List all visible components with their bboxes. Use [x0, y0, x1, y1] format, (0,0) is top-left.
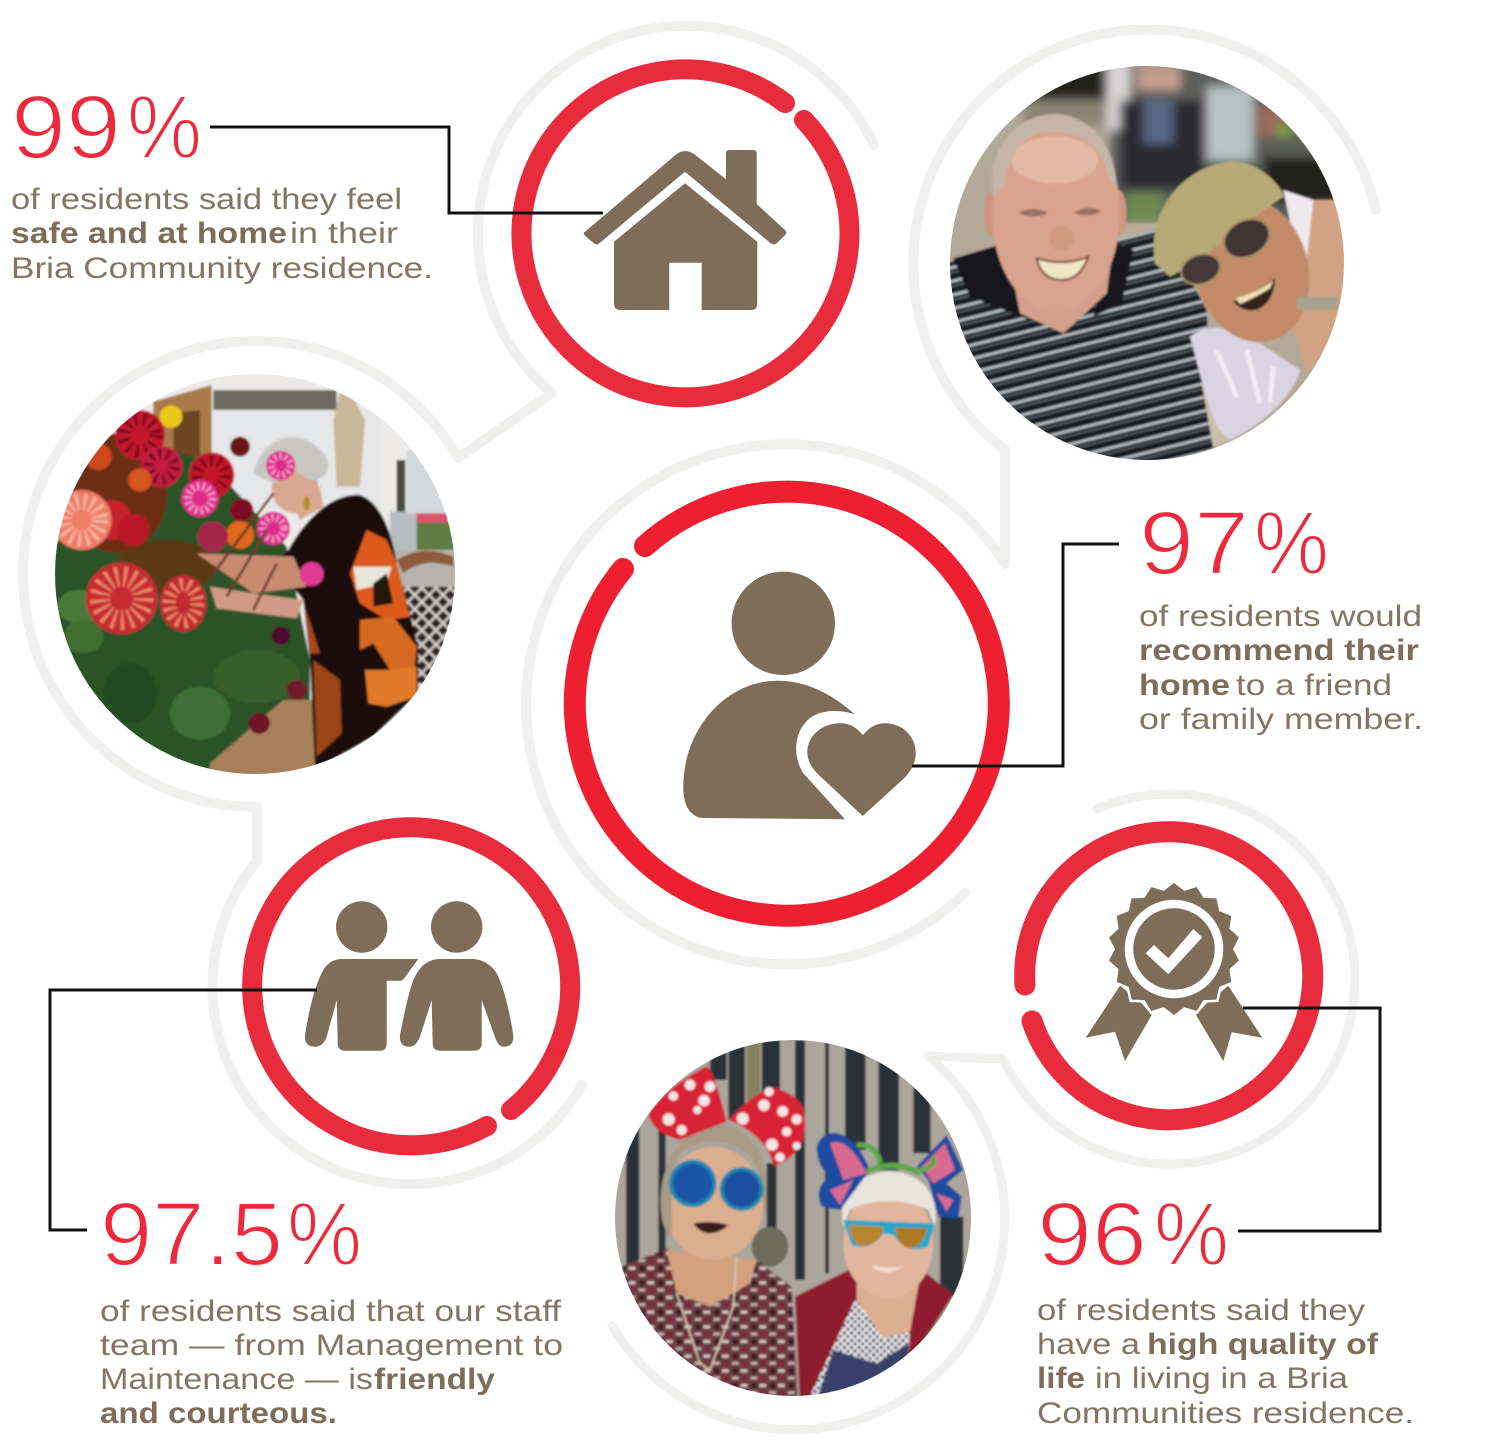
description: friendly	[374, 1363, 495, 1396]
big number	[1037, 1185, 1229, 1285]
right woman	[795, 1269, 953, 1410]
description: of residents said they	[1037, 1294, 1365, 1327]
big number: %	[287, 1185, 362, 1285]
connector: 99% to home icon	[210, 127, 603, 213]
shirt left man	[947, 227, 1217, 470]
big number: %	[1254, 494, 1329, 594]
red ring: home	[521, 69, 849, 397]
left woman	[622, 1248, 798, 1410]
description: Bria Community residence.	[11, 252, 433, 285]
description: or family member.	[1139, 703, 1423, 736]
description: of residents would	[1139, 600, 1422, 633]
polka bow	[648, 1066, 727, 1140]
description: life	[1037, 1362, 1085, 1395]
description	[11, 183, 433, 285]
icon: award ribbon	[1086, 883, 1262, 1061]
connector: 96% to ribbon icon	[1238, 1008, 1380, 1231]
dress	[273, 495, 418, 770]
red ring: recommend	[575, 492, 999, 916]
red ring: staff	[252, 827, 570, 1145]
description: in their	[290, 217, 398, 250]
description	[1139, 600, 1423, 736]
turquoise sunglasses	[843, 1220, 935, 1249]
arms	[197, 553, 307, 593]
stat block: 97%	[1139, 494, 1423, 736]
connector: 97% to heart icon	[912, 544, 1119, 766]
photo: woman arranging dahlias	[55, 374, 455, 774]
flowers	[160, 405, 182, 428]
description: have a	[1037, 1328, 1140, 1361]
head and hair	[296, 486, 324, 520]
big number	[11, 78, 202, 178]
description: Maintenance — is	[100, 1363, 373, 1396]
description	[100, 1295, 563, 1430]
photo: two smiling men	[950, 66, 1344, 460]
photo: two women in party glasses	[615, 1040, 971, 1396]
red ring: quality	[1025, 832, 1313, 1120]
stat block: 99%	[11, 78, 433, 285]
icon: house	[584, 150, 786, 310]
description: to a friend	[1236, 669, 1392, 702]
description: home	[1139, 669, 1230, 702]
cap and face right man	[1197, 204, 1310, 344]
icon: two people	[305, 901, 513, 1051]
stat block: 96%	[1037, 1185, 1414, 1430]
description: recommend their	[1139, 634, 1419, 667]
big number: 99	[11, 78, 121, 178]
chair and lattice	[393, 550, 460, 587]
stat block: 97.5%	[100, 1185, 563, 1430]
description: of residents said that our staff	[100, 1295, 562, 1328]
big number: 97	[1139, 494, 1249, 594]
background ring path: top right and centre chain	[526, 29, 1376, 964]
stems	[213, 493, 277, 610]
boa	[1202, 383, 1230, 448]
big number	[1139, 494, 1329, 594]
big number	[100, 1185, 362, 1285]
icon: person with heart	[683, 572, 916, 819]
butterfly wings	[817, 1133, 870, 1210]
background ring path: top and left chain	[23, 26, 874, 1184]
description: in living in a Bria	[1095, 1362, 1348, 1395]
big number: 97.5	[100, 1185, 283, 1285]
big number: 96	[1037, 1185, 1147, 1285]
description: Communities residence.	[1037, 1397, 1414, 1430]
description	[1037, 1294, 1414, 1430]
face left man	[984, 190, 994, 237]
arm right man	[1292, 198, 1344, 373]
description: of residents said they feel	[11, 183, 402, 216]
connector: 97.5% to people icon	[50, 990, 317, 1230]
big number: %	[127, 78, 202, 178]
background ring path: bottom right chain	[612, 794, 1355, 1430]
description: and courteous.	[100, 1397, 337, 1430]
foliage	[53, 440, 310, 777]
description: safe and at home	[11, 217, 287, 250]
description: team — from Management to	[100, 1329, 563, 1362]
description: high quality of	[1147, 1328, 1379, 1361]
big number: %	[1154, 1185, 1229, 1285]
planter	[210, 700, 317, 780]
